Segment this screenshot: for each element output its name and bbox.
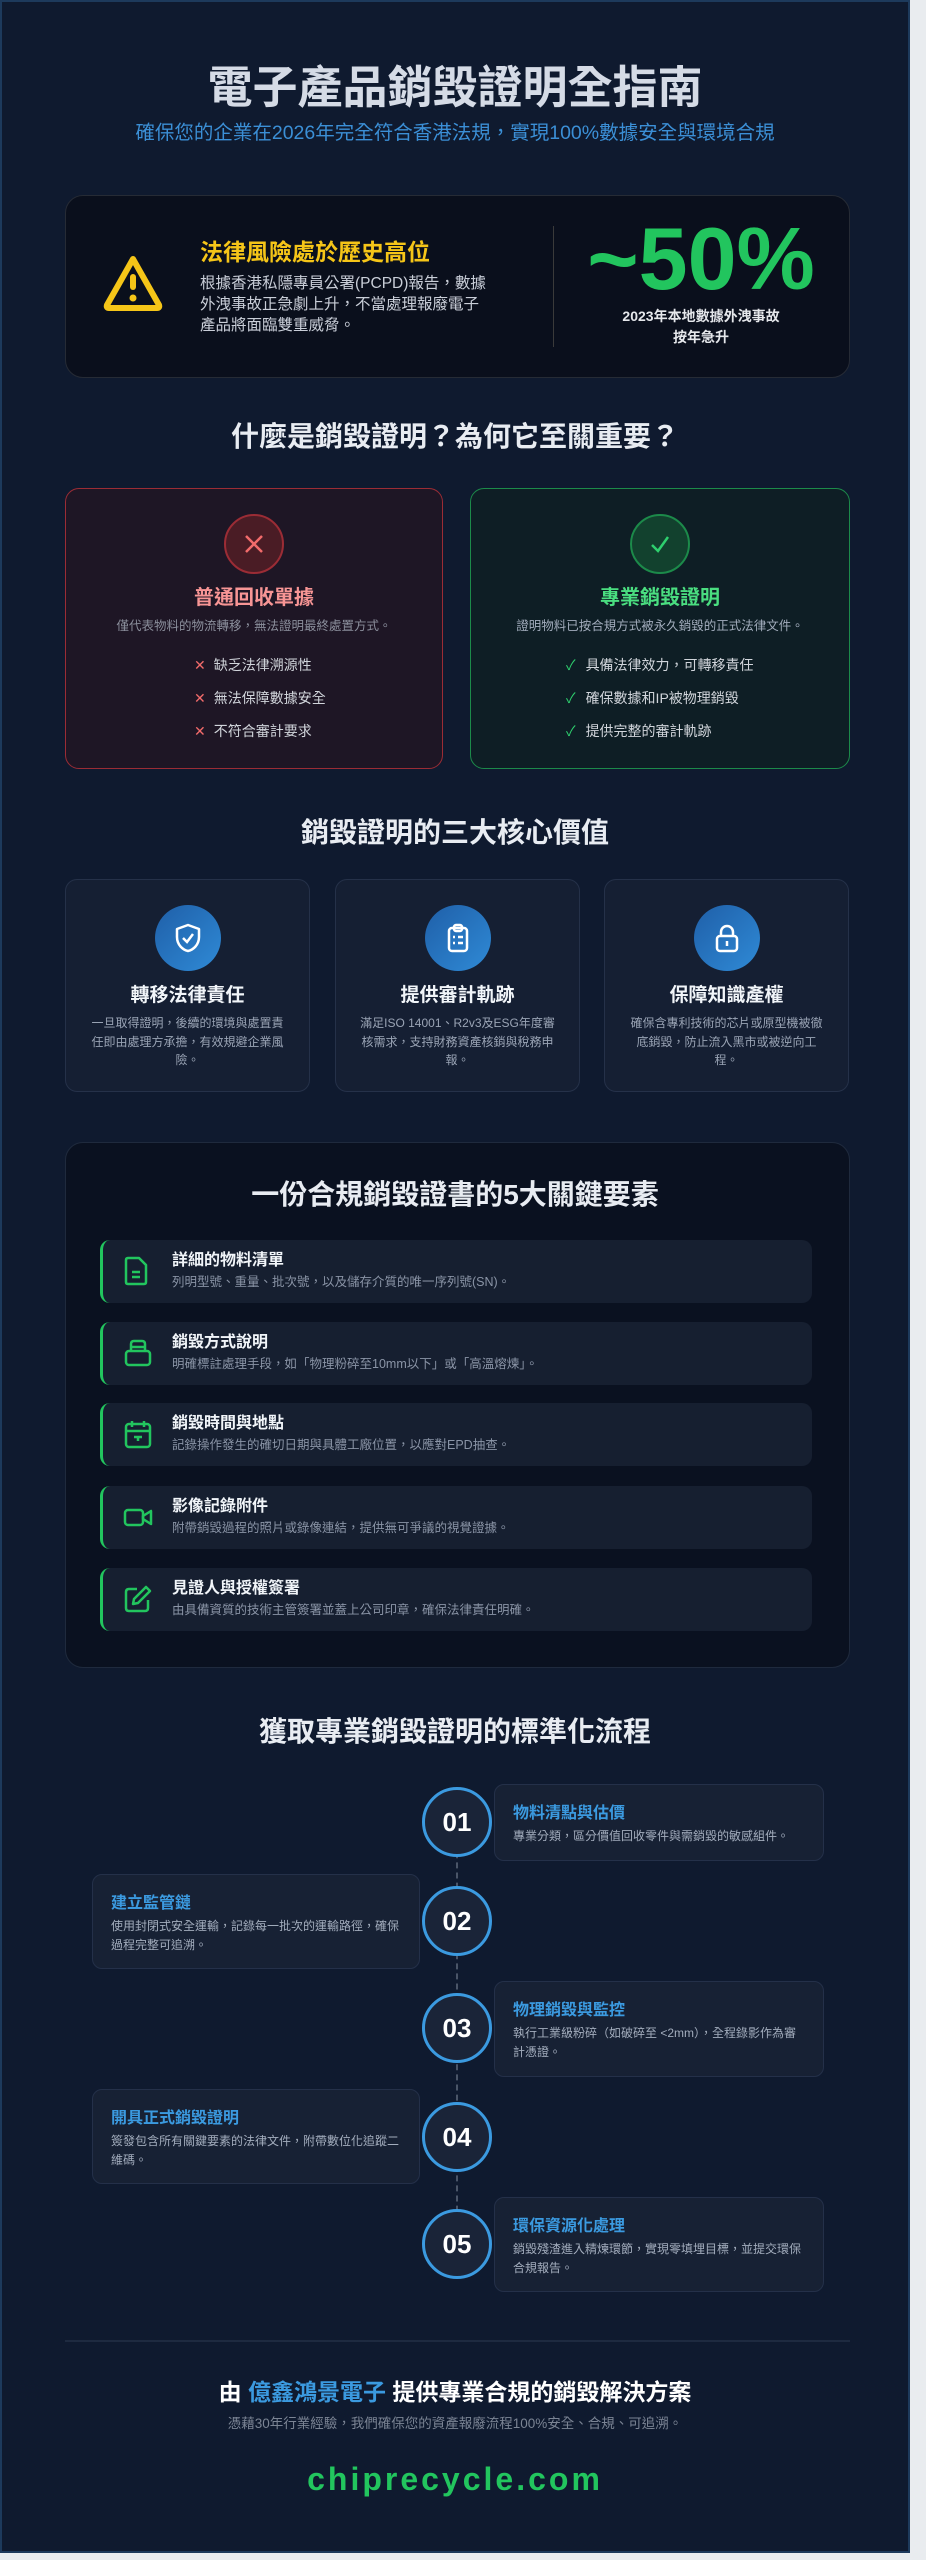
step 01 xyxy=(422,1784,824,1861)
timeline xyxy=(456,1857,458,2209)
icon: calendar xyxy=(124,1421,152,1448)
item: video: 附帶銷毀過程的照片或錄像連結，提供無可爭議的視覺證據。 xyxy=(172,1521,510,1535)
item: signature: 見證人與授權簽署 xyxy=(172,1580,300,1597)
panel: 5 key elements xyxy=(65,1142,850,1668)
list: ✓ 提供完整的審計軌跡 xyxy=(566,723,712,739)
heading: 專業銷毀證明 xyxy=(600,587,720,609)
list xyxy=(566,657,754,739)
subtitle: 確保您的企業在2026年完全符合香港法規，實現100%數據安全與環境合規 xyxy=(135,122,775,144)
card: audit trail xyxy=(335,879,580,1092)
step 01: 專業分類，區分價值回收零件與需銷毀的敏感組件。 xyxy=(513,1829,789,1843)
step 04: 04 xyxy=(443,2122,471,2152)
card: transfer liability: 一旦取得證明，後續的環境與處置責任即由處理方承擔，有效規避企業風險。 xyxy=(91,1016,284,1067)
panel: ordinary receipt xyxy=(65,488,443,769)
card: IP protection: 保障知識產權 xyxy=(669,985,784,1006)
footer heading: 由 億鑫鴻景電子 提供專業合規的銷毀解決方案 xyxy=(219,2379,691,2405)
panel: legal risk xyxy=(65,195,850,378)
step 02: 建立監管鏈 xyxy=(111,1895,191,1912)
heading: what is: 什麼是銷毀證明？為何它至關重要？ xyxy=(231,421,679,452)
heading: process: 獲取專業銷毀證明的標準化流程 xyxy=(259,1716,651,1747)
icon: shield xyxy=(155,905,221,971)
icon: clipboard xyxy=(425,905,491,971)
heading: 5 elements: 一份合規銷毀證書的5大關鍵要素 xyxy=(251,1179,659,1210)
footer text: 憑藉30年行業經驗，我們確保您的資產報廢流程100%安全、合規、可追溯。 xyxy=(228,2416,682,2431)
step 04 xyxy=(92,2089,492,2184)
icon: shredder xyxy=(124,1340,152,1366)
step 04: 開具正式銷毀證明 xyxy=(111,2110,239,2127)
icon: document xyxy=(124,1256,148,1286)
step 02: 02 xyxy=(443,1906,471,1936)
stat: 50%: 按年急升 xyxy=(673,329,729,345)
list: ✕ 缺乏法律溯源性 xyxy=(194,657,312,673)
step 01: 物料清點與估價 xyxy=(513,1805,625,1822)
icon: check circle xyxy=(630,514,690,574)
step 03: 03 xyxy=(443,2013,471,2043)
item: video xyxy=(100,1486,812,1549)
item: material list xyxy=(100,1240,812,1303)
card: IP protection: 確保含專利技術的芯片或原型機被徹底銷毀，防止流入黑市或被逆向工程。 xyxy=(630,1016,822,1067)
text: 證明物料已按合規方式被永久銷毀的正式法律文件。 xyxy=(516,619,804,633)
item: material list: 詳細的物料清單 xyxy=(172,1252,284,1269)
list xyxy=(194,657,326,739)
step 02: 使用封閉式安全運輸，記錄每一批次的運輸路徑，確保過程完整可追溯。 xyxy=(111,1919,399,1952)
step 05: 銷毀殘渣進入精煉環節，實現零填埋目標，並提交環保合規報告。 xyxy=(513,2242,801,2275)
card: IP protection xyxy=(604,879,849,1092)
item: time and place: 記錄操作發生的確切日期與具體工廠位置，以應對EPD抽查。 xyxy=(172,1438,510,1452)
list: ✓ 具備法律效力，可轉移責任 xyxy=(566,657,754,673)
item: method xyxy=(100,1322,812,1385)
item: video: 影像記錄附件 xyxy=(172,1498,268,1515)
step 04: 簽發包含所有關鍵要素的法律文件，附帶數位化追蹤二維碼。 xyxy=(111,2134,399,2167)
heading: risk: 法律風險處於歷史高位 xyxy=(200,239,430,265)
item: signature: 由具備資質的技術主管簽署並蓋上公司印章，確保法律責任明確。 xyxy=(172,1603,535,1617)
item: material list: 列明型號、重量、批次號，以及儲存介質的唯一序列號(SN)。 xyxy=(172,1275,510,1289)
icon: video camera xyxy=(124,1508,152,1526)
item: time and place xyxy=(100,1403,812,1466)
title: 電子產品銷毀證明全指南 xyxy=(207,62,702,113)
card: audit trail: 提供審計軌跡 xyxy=(400,985,514,1006)
icon: x circle xyxy=(224,514,284,574)
list: ✓ 確保數據和IP被物理銷毀 xyxy=(566,690,739,706)
item: method: 明確標註處理手段，如「物理粉碎至10mm以下」或「高溫熔煉」。 xyxy=(172,1357,538,1371)
item: signature xyxy=(100,1568,812,1631)
stat: 50%: ~50% xyxy=(587,209,815,308)
heading: three values: 銷毀證明的三大核心價值 xyxy=(301,817,609,848)
step 05: 環保資源化處理 xyxy=(513,2218,625,2235)
text: 僅代表物料的物流轉移，無法證明最終處置方式。 xyxy=(116,619,392,633)
heading: 普通回收單據 xyxy=(194,587,314,609)
footer url: chiprecycle.com xyxy=(307,2461,603,2497)
icon: warning xyxy=(104,256,162,311)
step 03 xyxy=(422,1981,824,2077)
list: ✕ 無法保障數據安全 xyxy=(194,690,326,706)
card: transfer liability xyxy=(65,879,310,1092)
icon: lock xyxy=(694,905,760,971)
step 03: 物理銷毀與監控 xyxy=(513,2002,625,2019)
card: audit trail: 滿足ISO 14001、R2v3及ESG年度審核需求，支持財務資產核銷與稅務申報。 xyxy=(360,1016,555,1067)
text: risk body: 根據香港私隱專員公署(PCPD)報告，數據外洩事故正急劇上升，不當處理報廢電子產品將面臨雙重威脅。 xyxy=(200,275,486,334)
list: ✕ 不符合審計要求 xyxy=(194,723,312,739)
step 05: 05 xyxy=(443,2229,471,2259)
step 01: 01 xyxy=(443,1807,471,1837)
stat: 50%: 2023年本地數據外洩事故 xyxy=(622,308,780,324)
panel: professional certificate xyxy=(470,488,850,769)
item: time and place: 銷毀時間與地點 xyxy=(172,1415,284,1432)
icon: pen xyxy=(124,1586,152,1612)
step 03: 執行工業級粉碎（如破碎至 <2mm），全程錄影作為審計憑證。 xyxy=(513,2026,796,2059)
item: method: 銷毀方式說明 xyxy=(172,1334,268,1351)
step 05 xyxy=(422,2197,824,2292)
card: transfer liability: 轉移法律責任 xyxy=(130,985,244,1006)
step 02 xyxy=(92,1874,492,1969)
